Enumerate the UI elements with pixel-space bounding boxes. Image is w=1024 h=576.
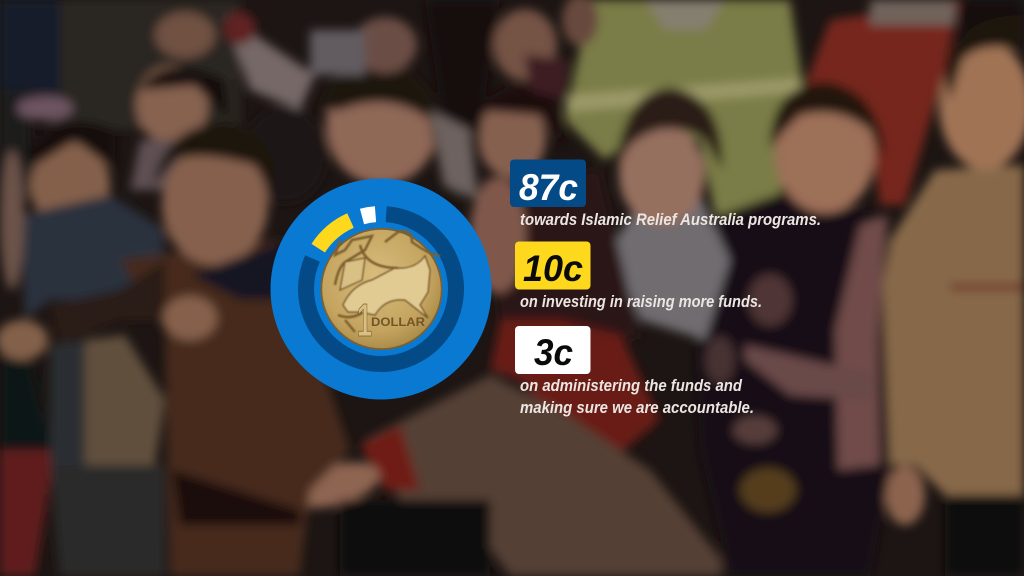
- 87c arc segment: [306, 214, 456, 364]
- coin: one Australian dollar: [320, 228, 442, 350]
- badge 10c: [515, 242, 590, 290]
- 3c arc segment: [362, 214, 376, 216]
- badge 10c: 10c: [523, 248, 583, 289]
- badge 3c: 3c: [534, 332, 573, 373]
- badge 3c: [515, 326, 590, 374]
- text: investing: on investing in raising more funds.: [520, 292, 762, 311]
- blue disc: [270, 178, 492, 400]
- text: towards programs: towards Islamic Relief Australia programs.: [520, 210, 821, 229]
- text: administering: on administering the funds and: [520, 376, 743, 395]
- badge 87c: 87c: [519, 167, 578, 208]
- donut chart with coin: [270, 178, 492, 400]
- callout: 3c: [515, 326, 754, 417]
- callout: 10c: [515, 242, 762, 311]
- 10c arc segment: [318, 220, 350, 248]
- DOLLAR: DOLLAR: [371, 315, 425, 329]
- badge 87c: [510, 160, 586, 208]
- numeral 1: 1: [357, 294, 372, 346]
- text: accountable: making sure we are accountable.: [520, 398, 754, 417]
- callout: 87c: [510, 160, 821, 229]
